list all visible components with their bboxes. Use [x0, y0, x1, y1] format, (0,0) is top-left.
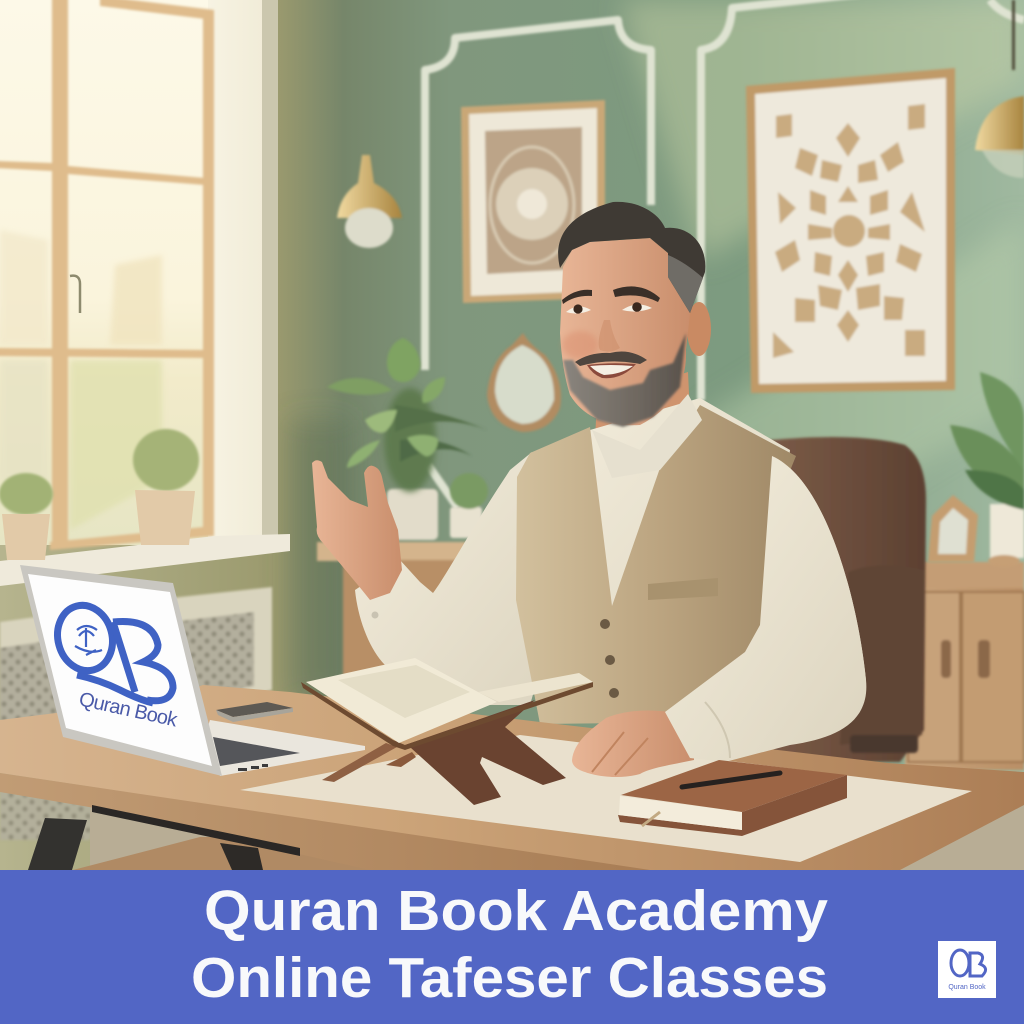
left pages — [306, 658, 497, 743]
window reveal — [200, 0, 264, 540]
wall panel mouldings — [425, 0, 1024, 508]
small QB logo badge: Quran Book — [948, 984, 986, 991]
right pages — [478, 673, 593, 702]
logo letter B — [113, 621, 173, 701]
desk leg left — [28, 818, 87, 870]
desk leg right — [220, 843, 263, 870]
desk crossbar — [92, 805, 300, 856]
sleeve cuff button — [372, 612, 378, 618]
notebook pages — [619, 796, 742, 830]
man — [312, 202, 866, 724]
large potted plant — [327, 338, 487, 540]
nose shadow — [599, 320, 620, 352]
logo palm — [75, 626, 102, 655]
pen — [682, 773, 780, 787]
desk top — [0, 685, 1024, 870]
laptop ports — [238, 764, 268, 771]
office chair — [750, 437, 926, 762]
bottom title banner — [0, 870, 1024, 1024]
desk front edge — [0, 773, 650, 870]
laptop — [20, 565, 365, 776]
window — [0, 0, 278, 550]
hanging lamp top right — [975, 0, 1024, 178]
garden haze behind glass — [0, 230, 162, 530]
floor — [73, 780, 1024, 870]
sleeve — [665, 456, 866, 762]
waistcoat pocket — [648, 578, 718, 600]
framed art: rosette — [461, 100, 605, 303]
title line 1: Quran Book Academy — [204, 879, 828, 943]
laptop base — [205, 720, 365, 776]
small picture frame on cabinet — [928, 495, 978, 562]
hair — [558, 202, 705, 313]
desk — [0, 685, 1024, 870]
logo wordmark: Quran Book — [77, 688, 180, 732]
cuff seam — [705, 702, 730, 758]
radiator cover — [0, 587, 272, 840]
face — [560, 238, 690, 425]
small shelf plant — [450, 473, 488, 538]
right potted plant — [950, 372, 1024, 567]
small QB logo badge — [938, 941, 996, 998]
printed text block — [338, 665, 470, 718]
laptop screen — [28, 574, 212, 766]
bookmark ribbon — [642, 812, 660, 826]
notebook back cover edge — [618, 815, 742, 836]
notebook cover — [621, 760, 847, 812]
book cover — [301, 682, 593, 750]
raised arm sleeve — [355, 452, 560, 705]
waistcoat — [516, 405, 796, 724]
shoulder behind right arm — [758, 456, 866, 700]
window panes — [0, 0, 208, 545]
eyebrows — [562, 286, 660, 304]
right cabinet — [905, 562, 1024, 770]
window handle — [70, 276, 80, 313]
moustache — [575, 352, 647, 366]
title line 2: Online Tafeser Classes — [191, 946, 828, 1010]
smile — [587, 363, 636, 378]
window plant left — [0, 473, 53, 560]
rehal left leg — [322, 743, 397, 782]
logo Q tail — [77, 675, 153, 703]
raised hand — [312, 460, 402, 600]
shirt collar — [592, 394, 702, 478]
logo letter Q — [50, 599, 120, 677]
hand — [572, 710, 694, 777]
notebook and pen — [618, 760, 847, 836]
window plant right — [133, 429, 199, 545]
phone — [216, 702, 293, 722]
shirt torso — [530, 398, 790, 720]
ear — [687, 302, 711, 356]
laptop lid — [20, 565, 222, 776]
framed art: geometric star pattern — [746, 68, 955, 393]
rehal back leg — [386, 752, 416, 767]
right arm and hand on desk — [572, 456, 866, 777]
Quran on wooden stand — [301, 658, 593, 805]
eyes — [566, 304, 652, 314]
neck — [595, 372, 690, 470]
window frame bars — [0, 0, 214, 550]
keyboard — [213, 737, 300, 766]
wall shading and sunlight — [290, 0, 1024, 700]
cheek blush — [562, 331, 598, 359]
desk mat — [240, 735, 972, 862]
window sill — [0, 534, 290, 586]
rehal body — [405, 700, 566, 805]
beard — [563, 333, 686, 427]
greying temple — [668, 255, 703, 313]
back shelf left — [317, 542, 483, 690]
wall mirror — [487, 333, 561, 432]
waistcoat buttons — [600, 619, 619, 698]
wall lamp — [337, 155, 402, 248]
finger shadow lines — [592, 732, 648, 775]
notebook spine side — [742, 775, 847, 836]
QB logo on screen — [50, 599, 173, 703]
